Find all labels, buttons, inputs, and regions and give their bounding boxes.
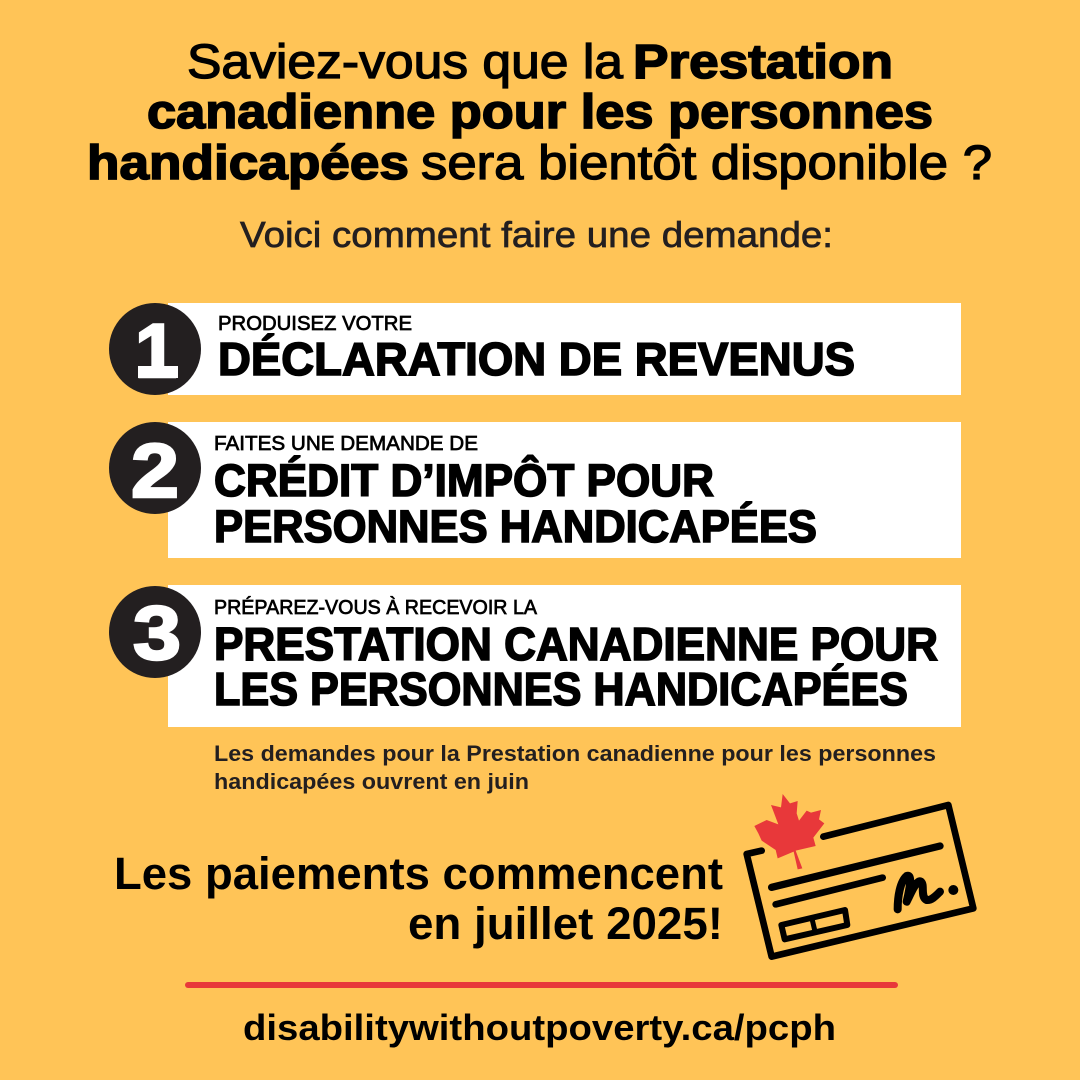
title: handicapées (87, 137, 409, 190)
step 3 badge: 3 (133, 591, 181, 676)
note: June applications: handicapées ouvrent en juin (214, 769, 529, 794)
step 1 text: DÉCLARATION DE REVENUS (218, 333, 855, 385)
red divider (185, 982, 898, 988)
step 2 panel (109, 422, 961, 558)
step 2 text: PERSONNES HANDICAPÉES (214, 501, 817, 552)
step 3 badge (109, 586, 201, 678)
step 2 text: CRÉDIT D’IMPÔT POUR (214, 455, 714, 506)
note: June applications (214, 741, 936, 794)
title: Saviez-vous que la (187, 36, 623, 89)
step 1 text: PRODUISEZ VOTRE (218, 313, 412, 335)
step 2 text (214, 433, 817, 552)
payments callout (114, 848, 723, 949)
title: sera bientôt disponible ? (421, 137, 992, 190)
website url: disabilitywithoutpoverty.ca/pcph (243, 1007, 836, 1048)
step 2 text: FAITES UNE DEMANDE DE (214, 433, 478, 455)
title (87, 36, 992, 190)
note: June applications: Les demandes pour la Prestation canadienne pour les personnes (214, 741, 936, 766)
icon: cheque with maple leaf (747, 794, 973, 957)
subtitle: Voici comment faire une demande: (240, 214, 833, 255)
step 1 badge: 1 (135, 309, 177, 394)
step 2 bar (168, 422, 961, 558)
step 2 badge: 2 (131, 429, 179, 514)
title: canadienne pour les personnes (147, 86, 933, 139)
step 3 bar (168, 585, 961, 727)
step 3 text: PRÉPAREZ-VOUS À RECEVOIR LA (214, 596, 538, 619)
payments callout: Les paiements commencent (114, 848, 723, 899)
step 3 text (214, 596, 938, 715)
step 3 panel (109, 585, 961, 727)
step 3 text: LES PERSONNES HANDICAPÉES (214, 663, 908, 715)
step 1 bar (168, 303, 961, 395)
step 1 panel (109, 303, 961, 395)
step 2 badge (109, 422, 201, 514)
step 1 badge (109, 303, 201, 395)
title: Prestation (633, 36, 893, 89)
payments callout: en juillet 2025! (408, 898, 723, 949)
step 3 text: PRESTATION CANADIENNE POUR (214, 618, 938, 670)
